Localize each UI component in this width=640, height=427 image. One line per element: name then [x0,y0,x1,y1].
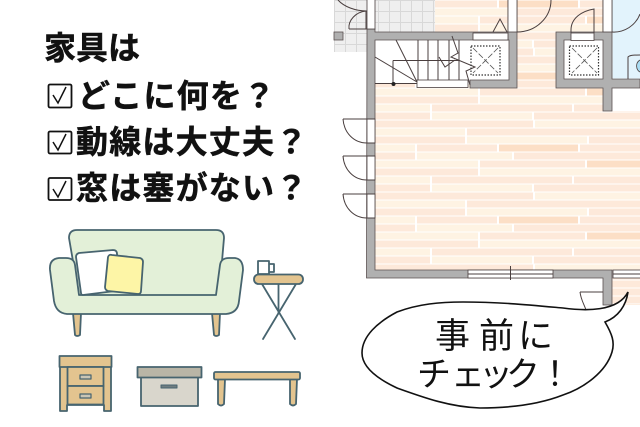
heading line: 家具は [44,30,140,66]
stair pivot dot [392,82,396,86]
sofa [50,230,243,336]
box handle [161,385,177,388]
sofa seat and arms [50,258,243,314]
sofa back [69,230,224,296]
stair room [375,40,509,84]
checklist item 2: 動線は大丈夫？ [76,124,308,160]
lower wood floor strip [612,278,640,305]
chest legs and sides [60,366,111,411]
tiled entry floor [334,0,435,52]
drawer handles [80,375,91,398]
wood floor [375,0,640,270]
box lid [138,367,202,378]
upper drawer [68,367,104,386]
white store room [612,88,640,111]
blue bathroom floor [612,0,640,79]
white cushion [76,250,123,295]
heading: furniture checklist [44,30,308,206]
table top [214,372,300,380]
small wall stub [334,32,343,40]
bath tub edge [637,60,640,72]
window bottom right [613,270,640,278]
yellow cushion [105,255,143,294]
side table with mug [254,261,303,339]
bubble outline [362,292,628,408]
mug [258,261,274,274]
speech bubble [362,292,628,408]
floor plan [334,0,640,310]
checklist item 1: どこに何を？ [78,78,276,114]
storage box [138,367,202,406]
window bottom centre [468,266,553,280]
outer and inner walls [366,0,612,305]
lower drawer [68,386,104,404]
shaft box right [570,46,598,75]
table legs [262,284,296,339]
table top [254,274,303,284]
door swings [338,0,640,310]
low table [214,372,300,406]
bubble text line 1: 事前に [435,317,553,356]
box body [141,377,198,406]
right shaft room [564,40,603,79]
staircase [375,36,475,85]
table legs [218,379,297,406]
checklist item 3: 窓は塞がない？ [76,170,308,206]
shaft box left [471,46,500,75]
sofa legs [73,313,220,336]
right shaft walls [556,0,640,111]
chest top [60,356,112,367]
white wall openings [367,0,612,218]
drawer chest [60,356,112,411]
bubble text line 2: チェック！ [417,356,572,394]
